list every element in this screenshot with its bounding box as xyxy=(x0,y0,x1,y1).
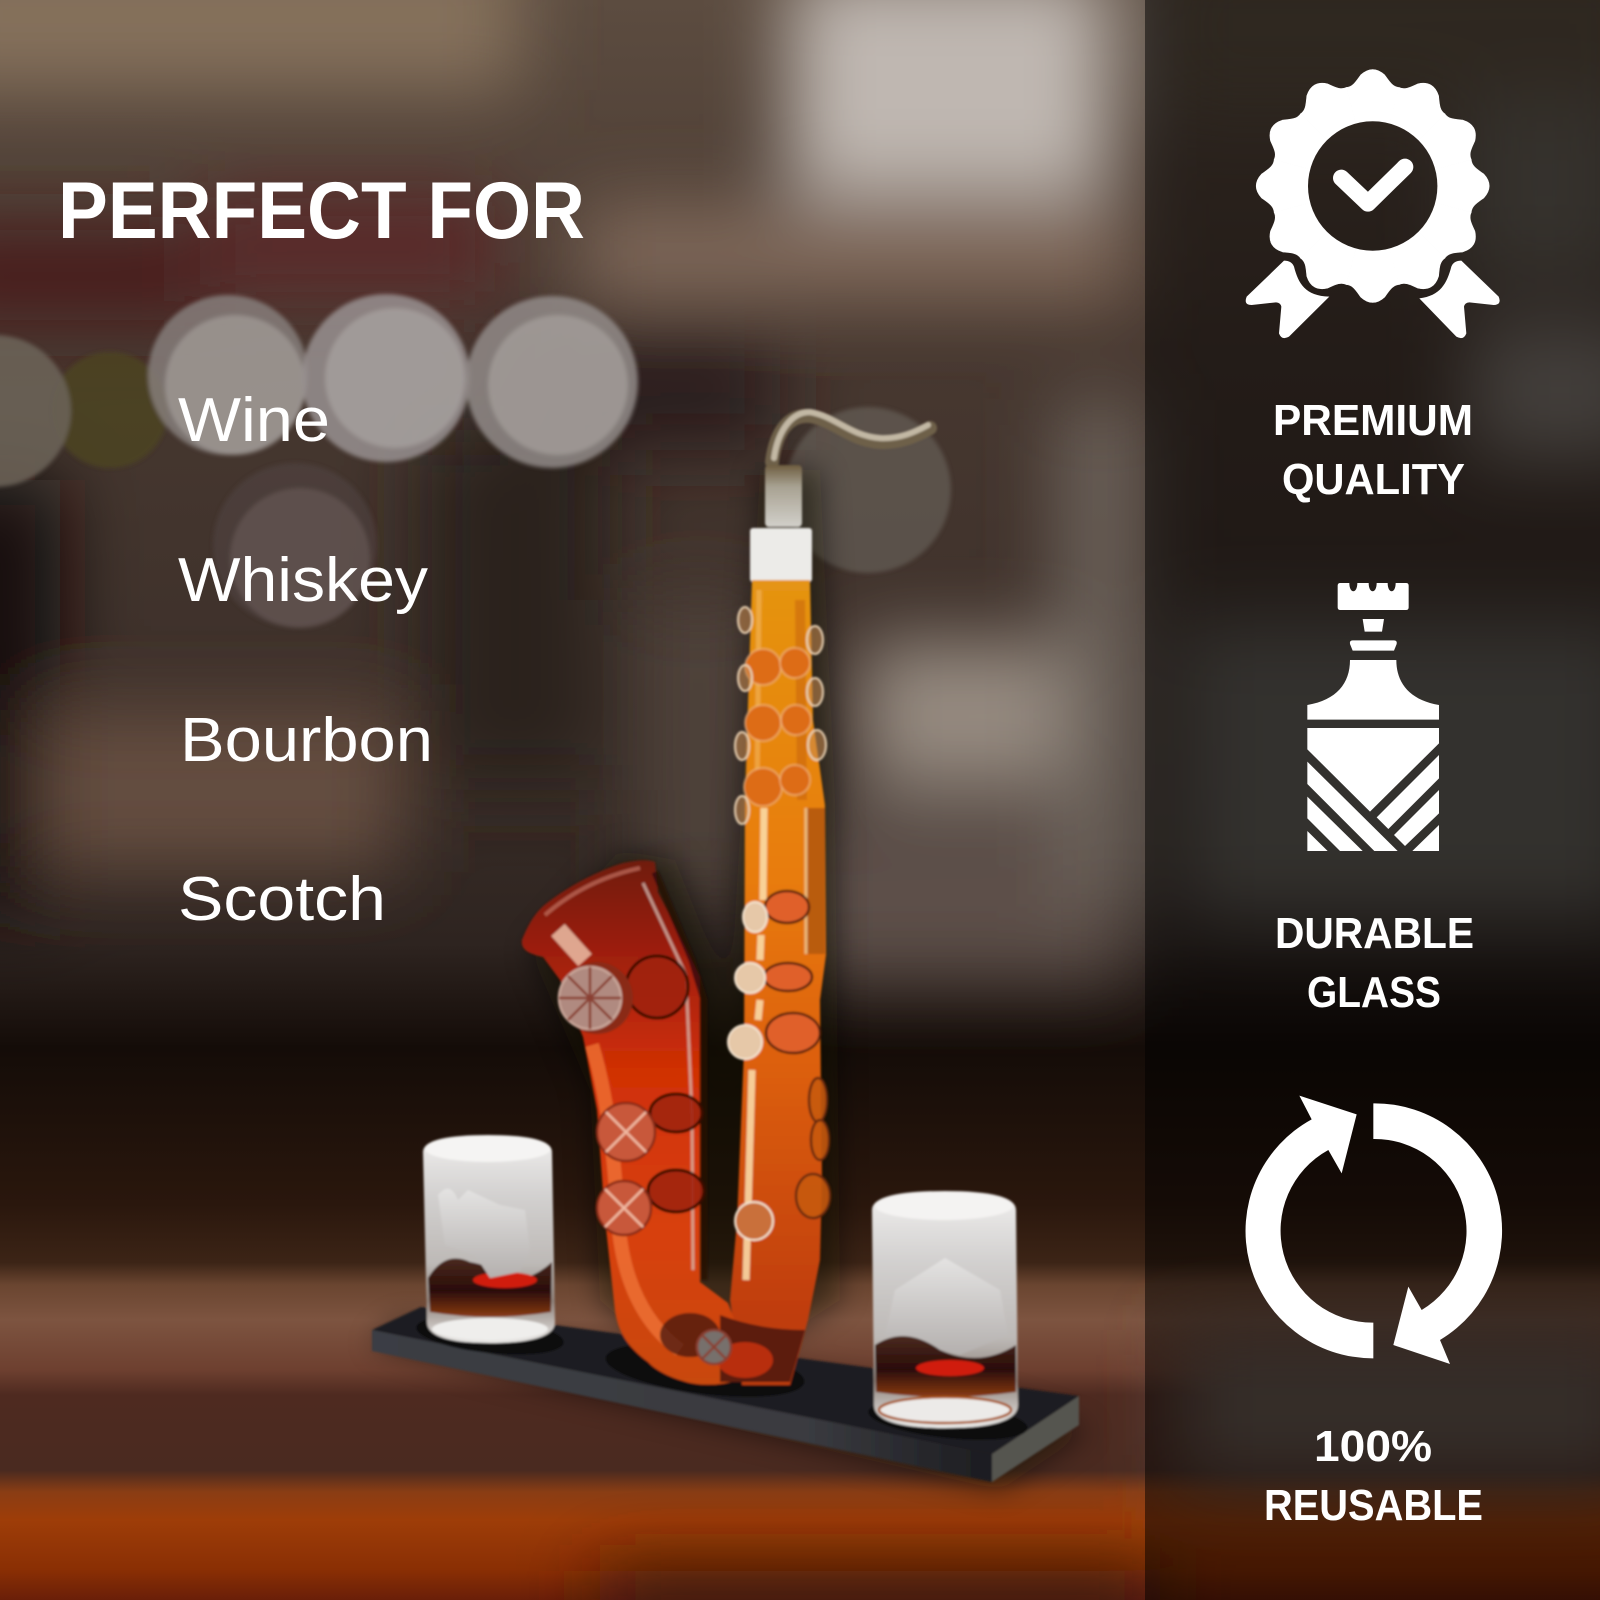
feature: durable glass xyxy=(1275,583,1474,1017)
right shot glass xyxy=(872,1191,1018,1428)
saxophone stopper and neck xyxy=(750,465,812,582)
product: saxophone decanter set xyxy=(370,412,1090,1490)
label xyxy=(1273,396,1473,504)
list item: wine: Wine xyxy=(178,386,330,455)
saxophone mouthpiece xyxy=(772,412,930,462)
label: REUSABLE xyxy=(1264,1481,1483,1530)
label: DURABLE xyxy=(1275,909,1474,958)
label: PREMIUM xyxy=(1273,396,1473,445)
feature: 100% reusable xyxy=(1246,1096,1502,1530)
icon: circular arrows xyxy=(1246,1096,1502,1364)
product shadow xyxy=(370,470,1090,1490)
label: 100% xyxy=(1314,1422,1432,1471)
title: PERFECT FOR xyxy=(58,166,585,256)
list: drink types xyxy=(178,386,433,934)
list item: bourbon: Bourbon xyxy=(180,706,433,775)
panel: right dark features column xyxy=(1145,0,1600,1600)
left shot glass xyxy=(423,1135,555,1343)
list item: scotch: Scotch xyxy=(178,865,386,934)
list item: whiskey: Whiskey xyxy=(178,546,428,615)
saxophone straight tube xyxy=(730,580,826,1385)
feature: premium quality xyxy=(1246,69,1500,502)
label xyxy=(1275,909,1474,1017)
saxophone bell xyxy=(522,860,742,1385)
icon: decanter bottle xyxy=(1307,583,1439,851)
bokeh lights xyxy=(0,294,951,628)
icon: award badge with check xyxy=(1246,69,1500,338)
saxophone tube detail xyxy=(728,590,830,1280)
saxophone bell detail xyxy=(545,868,805,1382)
label xyxy=(1264,1422,1483,1530)
label: QUALITY xyxy=(1282,455,1465,504)
label: GLASS xyxy=(1307,968,1441,1017)
wooden tray xyxy=(372,1307,1079,1482)
